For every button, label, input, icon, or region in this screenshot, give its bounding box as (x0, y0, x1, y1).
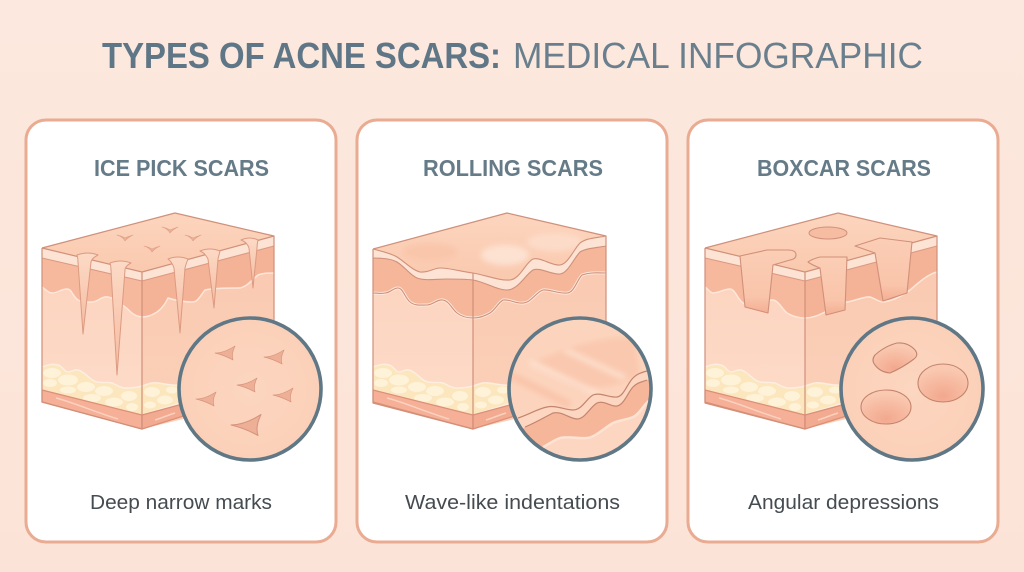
title (102, 35, 923, 76)
skin cube: boxcar (705, 213, 937, 429)
caption: ice pick: Deep narrow marks (90, 492, 272, 514)
magnifier: boxcar (841, 318, 983, 460)
skin cube: ice pick (42, 213, 274, 429)
panel frame (26, 120, 336, 542)
magnifier: rolling (500, 318, 660, 460)
panel frame (357, 120, 667, 542)
surface oval (809, 227, 847, 239)
ice pick channels (77, 238, 258, 375)
title: MEDICAL INFOGRAPHIC (513, 35, 923, 76)
caption: rolling: Wave-like indentations (405, 492, 620, 514)
heading: boxcar scars: BOXCAR SCARS (757, 155, 931, 181)
panel: ice pick scars (26, 120, 336, 542)
panel frame (688, 120, 998, 542)
title: TYPES OF ACNE SCARS: (102, 35, 501, 76)
box depressions (740, 238, 912, 315)
magnifier: ice pick (179, 318, 321, 460)
caption: boxcar: Angular depressions (748, 492, 939, 514)
skin cube: rolling (373, 213, 606, 429)
panel: boxcar scars (688, 120, 998, 542)
heading: rolling scars: ROLLING SCARS (423, 155, 603, 181)
heading: ice pick scars: ICE PICK SCARS (94, 155, 269, 181)
panel: rolling scars (357, 120, 667, 542)
surface marks (117, 235, 133, 241)
